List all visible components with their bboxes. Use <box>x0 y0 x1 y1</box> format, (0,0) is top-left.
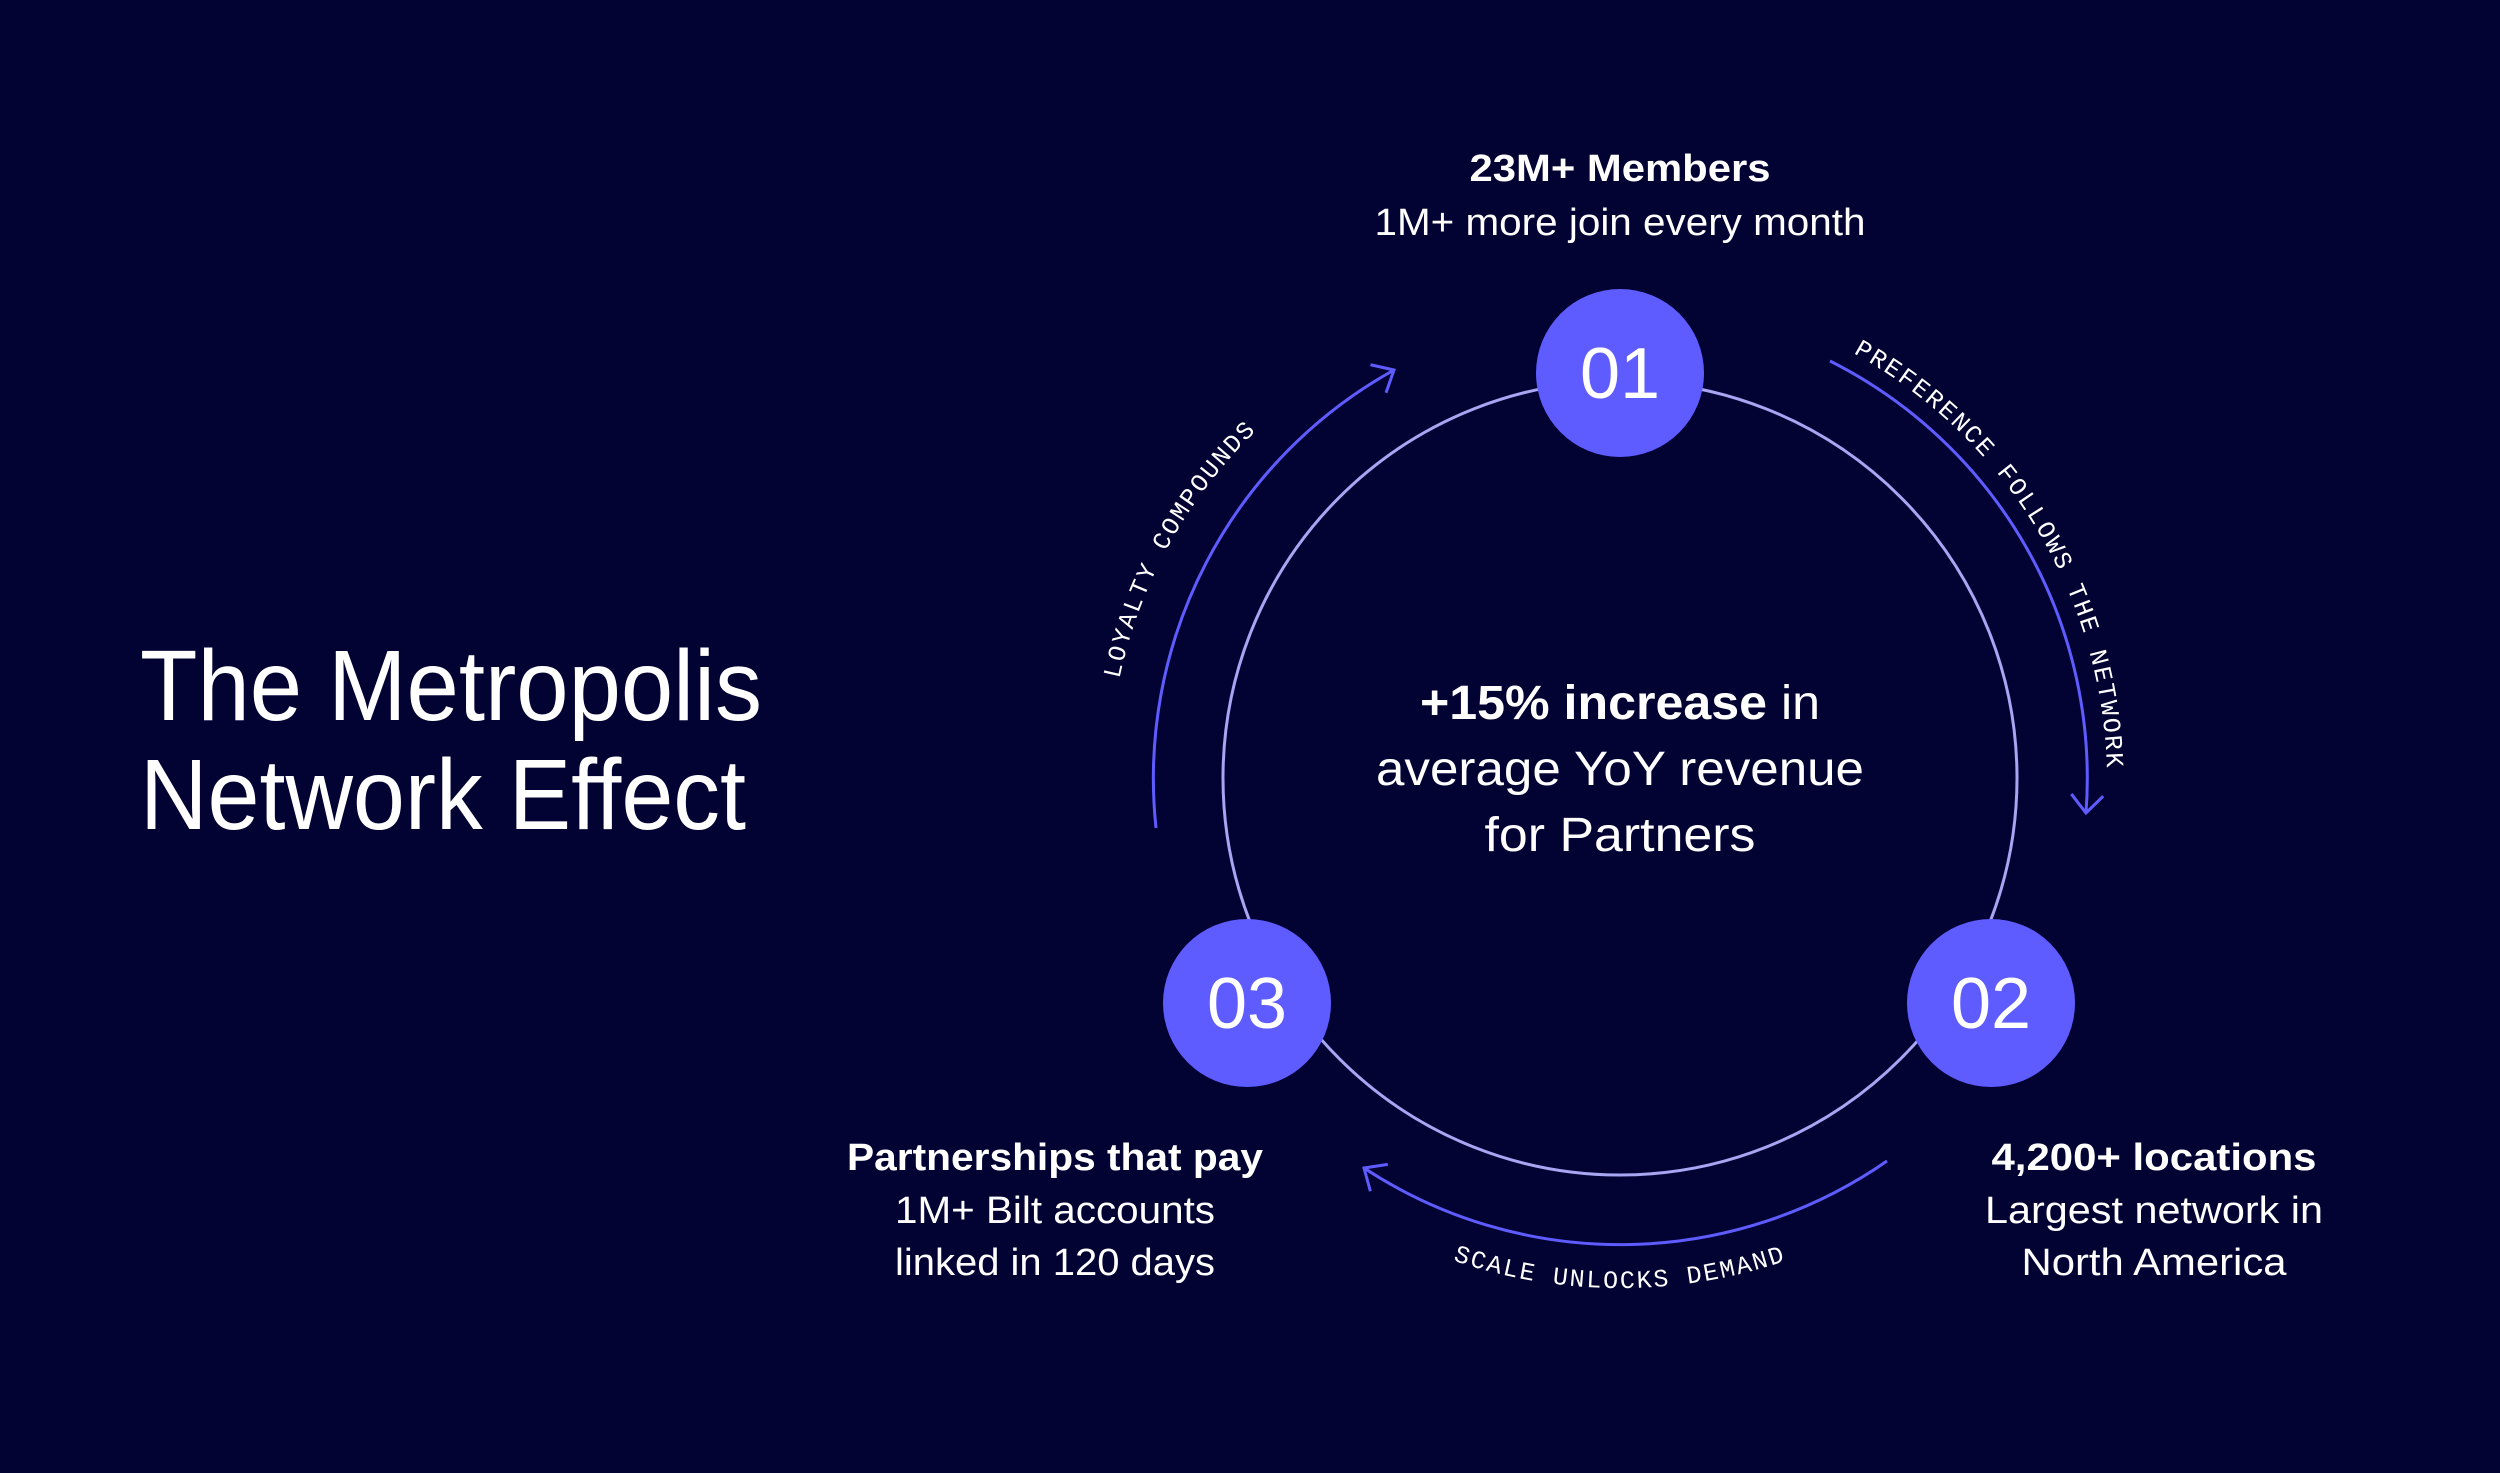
text block: locations <box>1985 1137 2323 1284</box>
node 03: 03 <box>1207 964 1287 1044</box>
text block: partnerships: linked in 120 days <box>895 1242 1215 1284</box>
label: preference follows the network: PREFERENCE FOLLOWS THE NETWORK <box>1855 340 2124 768</box>
text block: partnerships <box>847 1137 1263 1284</box>
center text: revenue increase: for Partners <box>1484 809 1756 862</box>
label: scale unlocks demand: SCALE UNLOCKS DEMAND <box>1454 1246 1782 1288</box>
node 03 <box>1163 919 1331 1087</box>
node 01 <box>1536 289 1704 457</box>
title: The Metropolis <box>140 630 762 742</box>
label: loyalty compounds: LOYALTY COMPOUNDS <box>1104 422 1253 676</box>
text block: members: 23M+ Members <box>1470 148 1770 190</box>
title: Network Effect <box>140 739 746 851</box>
text block: members: 1M+ more join every month <box>1374 202 1866 244</box>
text block: members <box>1374 148 1866 244</box>
node 01: 01 <box>1580 334 1660 414</box>
text block: partnerships: Partnerships that pay <box>847 1137 1263 1179</box>
text block: partnerships: 1M+ Bilt accounts <box>895 1190 1215 1232</box>
arrow: loyalty compounds <box>1153 356 1402 828</box>
node 02 <box>1907 919 2075 1087</box>
text block: locations: Largest network in <box>1985 1190 2323 1232</box>
main cycle circle <box>1223 381 2017 1175</box>
node 02: 02 <box>1951 964 2031 1044</box>
center text: revenue increase: average YoY revenue <box>1376 743 1864 796</box>
text block: locations: North America <box>2022 1242 2287 1284</box>
arrow: preference follows the network <box>1830 361 2103 814</box>
center text: revenue increase <box>1376 677 1864 862</box>
text block: locations: 4,200+ locations <box>1992 1137 2316 1179</box>
arrow: scale unlocks demand <box>1355 1155 1887 1245</box>
title <box>140 630 762 851</box>
center text: revenue increase: +15% increase in <box>1420 677 1820 730</box>
